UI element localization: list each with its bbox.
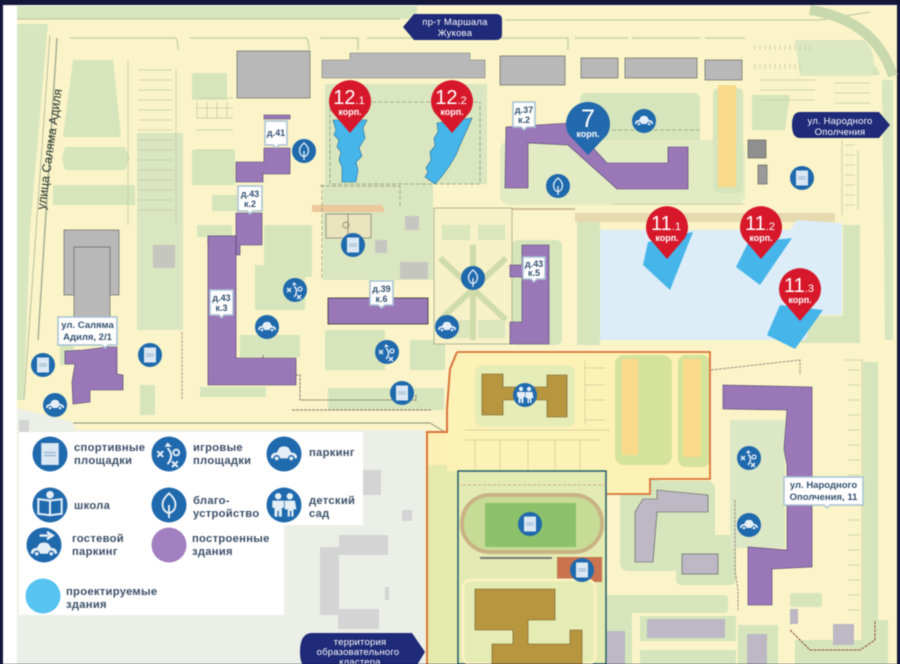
label: д.39 к.6: д.39 xyxy=(372,284,391,294)
direction sign: территория образовательного кластера: образовательного xyxy=(317,647,399,658)
legend: детский сад: детский xyxy=(309,495,355,507)
legend: паркинг xyxy=(266,436,355,472)
direction sign: территория образовательного кластера: территория xyxy=(334,637,386,648)
legend: гостевой паркинг xyxy=(26,528,124,562)
label: д.37 к.2: д.37 xyxy=(515,105,533,115)
icon: kindergarten xyxy=(513,383,537,407)
legend: спортивные площадки xyxy=(32,436,145,472)
purple building: ул. Салям Адиля 2/1 xyxy=(65,347,123,404)
pin: корпус 12.2: корп. xyxy=(440,107,464,117)
icon: sports court south xyxy=(390,381,414,405)
pin: корпус 11.2 xyxy=(740,206,782,259)
purple building: д.43 к.5 xyxy=(510,245,549,344)
pin: корпус 12.2: 12.2 xyxy=(435,87,467,109)
gold buildings xyxy=(475,374,582,664)
legend: построенные здания: здания xyxy=(192,546,233,558)
legend: школа xyxy=(32,488,111,522)
pin: корпус 11.1 xyxy=(646,206,688,259)
label: ул. Саляма Адиля, 2/1 xyxy=(58,317,117,348)
label: ул. Саляма Адиля, 2/1: ул. Саляма xyxy=(61,320,114,331)
stadium xyxy=(458,471,606,664)
icon: orange court sports xyxy=(570,558,594,582)
direction sign: ул. Народного Ополчения: ул. Народного xyxy=(807,116,873,127)
legend: спортивные площадки: площадки xyxy=(74,455,132,467)
pin: корпус 12.1 xyxy=(329,80,371,133)
walkway band xyxy=(70,102,875,650)
purple building: д.43 к.3 xyxy=(208,236,296,385)
label: ул. Народного Ополчения, 11: Ополчения, 11 xyxy=(790,492,858,503)
icon: sports court east xyxy=(790,166,814,190)
icon: parking near corp 7 xyxy=(632,109,656,133)
direction sign: ул. Народного Ополчения xyxy=(792,112,890,138)
legend: игровые площадки xyxy=(152,436,251,472)
icon: playground near д.43 к.3 xyxy=(283,278,307,302)
projected building 11.3 xyxy=(767,305,823,349)
lower left neighbouring area xyxy=(17,408,425,664)
pin: корпус 7: корп. xyxy=(576,129,600,139)
icon: playground east courtyard xyxy=(737,446,761,470)
yellow strips xyxy=(622,85,736,457)
pin: корпус 11.3: корп. xyxy=(788,295,812,305)
label: д.39 к.6 xyxy=(370,281,393,308)
icon: parking near д.43 к.3 xyxy=(255,315,279,339)
pin: корпус 12.2 xyxy=(431,80,473,133)
icon: parking far west xyxy=(43,393,67,417)
pin: корпус 11.2: корп. xyxy=(749,233,773,243)
label: д.43 к.3: д.43 xyxy=(212,293,231,303)
purple building: д.39 к.6 xyxy=(328,298,428,324)
purple building: д.43 к.2 xyxy=(208,213,262,255)
label: д.41: д.41 xyxy=(267,128,285,138)
icon: stadium sports xyxy=(518,512,542,536)
label: д.43 к.2: к.2 xyxy=(244,199,256,209)
label: ул. Саляма Адиля, 2/1: Адиля, 2/1 xyxy=(63,332,113,343)
label: д.37 к.2 xyxy=(513,102,535,130)
label: д.43 к.2 xyxy=(238,186,262,214)
legend: проектируемые здания: проектируемые xyxy=(66,586,157,598)
label: д.43 к.3 xyxy=(210,290,233,318)
label: д.43 к.5 xyxy=(523,257,545,282)
pin: корпус 7 xyxy=(566,102,610,155)
direction sign: пр-т Маршала Жукова: пр-т Маршала xyxy=(422,17,488,28)
street name: улица Саляма Адиля: улица Саляма Адиля xyxy=(34,88,65,210)
direction sign: пр-т Маршала Жукова xyxy=(403,14,502,40)
legend: благоустройство: устройство xyxy=(193,508,259,520)
pin: корпус 12.1: 12.1 xyxy=(333,87,365,109)
pin: корпус 11.1: 11.1 xyxy=(651,213,681,235)
direction sign: пр-т Маршала Жукова: Жукова xyxy=(438,28,473,39)
parking and roads lines xyxy=(128,45,870,640)
icon: sports court far west xyxy=(31,353,55,377)
pin: корпус 11.3 xyxy=(779,268,821,321)
label: д.43 к.5: к.5 xyxy=(528,268,540,278)
legend: паркинг: паркинг xyxy=(309,447,355,459)
projected building 11.1 xyxy=(643,232,693,290)
label: д.41 xyxy=(265,121,287,148)
label: ул. Народного Ополчения, 11 xyxy=(784,477,863,508)
projected building 11.2 xyxy=(736,238,792,285)
projected building 12.2 xyxy=(425,118,472,184)
label: д.43 к.2: д.43 xyxy=(241,189,259,199)
purple building: д.37 к.2 xyxy=(505,123,688,189)
legend: спортивные площадки: спортивные xyxy=(74,442,145,454)
legend: детский сад: сад xyxy=(309,508,330,520)
direction sign: ул. Народного Ополчения: Ополчения xyxy=(815,127,865,138)
star courtyard xyxy=(434,208,512,344)
pin: корпус 11.1: корп. xyxy=(655,233,679,243)
icon: parking east courtyard xyxy=(737,513,761,537)
projected building 12.1 xyxy=(333,120,367,182)
legend: игровые площадки: игровые xyxy=(193,442,243,454)
label: д.43 к.5: д.43 xyxy=(525,259,543,269)
purple building: д.41 xyxy=(236,115,290,182)
icon: playground below д.39 xyxy=(375,340,399,364)
legend: благоустройство xyxy=(152,488,259,522)
legend: гостевой паркинг: гостевой xyxy=(72,533,124,545)
pin: корпус 7: 7 xyxy=(581,105,595,133)
projected building zone xyxy=(600,220,842,340)
label: д.39 к.6: к.6 xyxy=(375,294,388,304)
legend: проектируемые здания: здания xyxy=(66,599,107,611)
legend: игровые площадки: площадки xyxy=(193,455,251,467)
icon: leaf near д.37 xyxy=(546,174,570,198)
legend: построенные здания: построенные xyxy=(192,533,270,545)
legend: школа: школа xyxy=(74,500,111,512)
label: ул. Народного Ополчения, 11: ул. Народного xyxy=(790,480,857,491)
label: д.37 к.2: к.2 xyxy=(518,115,530,125)
purple building: ул. Народного Ополчения, 11 xyxy=(723,385,812,605)
pin: корпус 11.3: 11.3 xyxy=(784,275,814,297)
icon: sports court near д.39 xyxy=(341,233,365,257)
legend: построенные здания xyxy=(152,528,270,562)
legend: проектируемые здания xyxy=(26,578,157,614)
icon: leaf near д.41 xyxy=(292,139,316,163)
icon: leaf in star courtyard xyxy=(461,266,485,290)
icon: parking near д.39 xyxy=(435,315,459,339)
basketball court area xyxy=(326,214,419,238)
legend: гостевой паркинг: паркинг xyxy=(72,546,118,558)
label: д.43 к.3: к.3 xyxy=(215,303,228,313)
pin: корпус 11.2: 11.2 xyxy=(745,213,775,235)
direction sign: территория образовательного кластера xyxy=(300,633,425,664)
icon: sports court west xyxy=(138,343,162,367)
legend: детский сад xyxy=(266,488,355,522)
pin: корпус 12.1: корп. xyxy=(338,107,362,117)
legend: благоустройство: благо- xyxy=(193,495,230,507)
legend panel xyxy=(19,432,363,615)
orange boundary zone xyxy=(427,352,710,664)
